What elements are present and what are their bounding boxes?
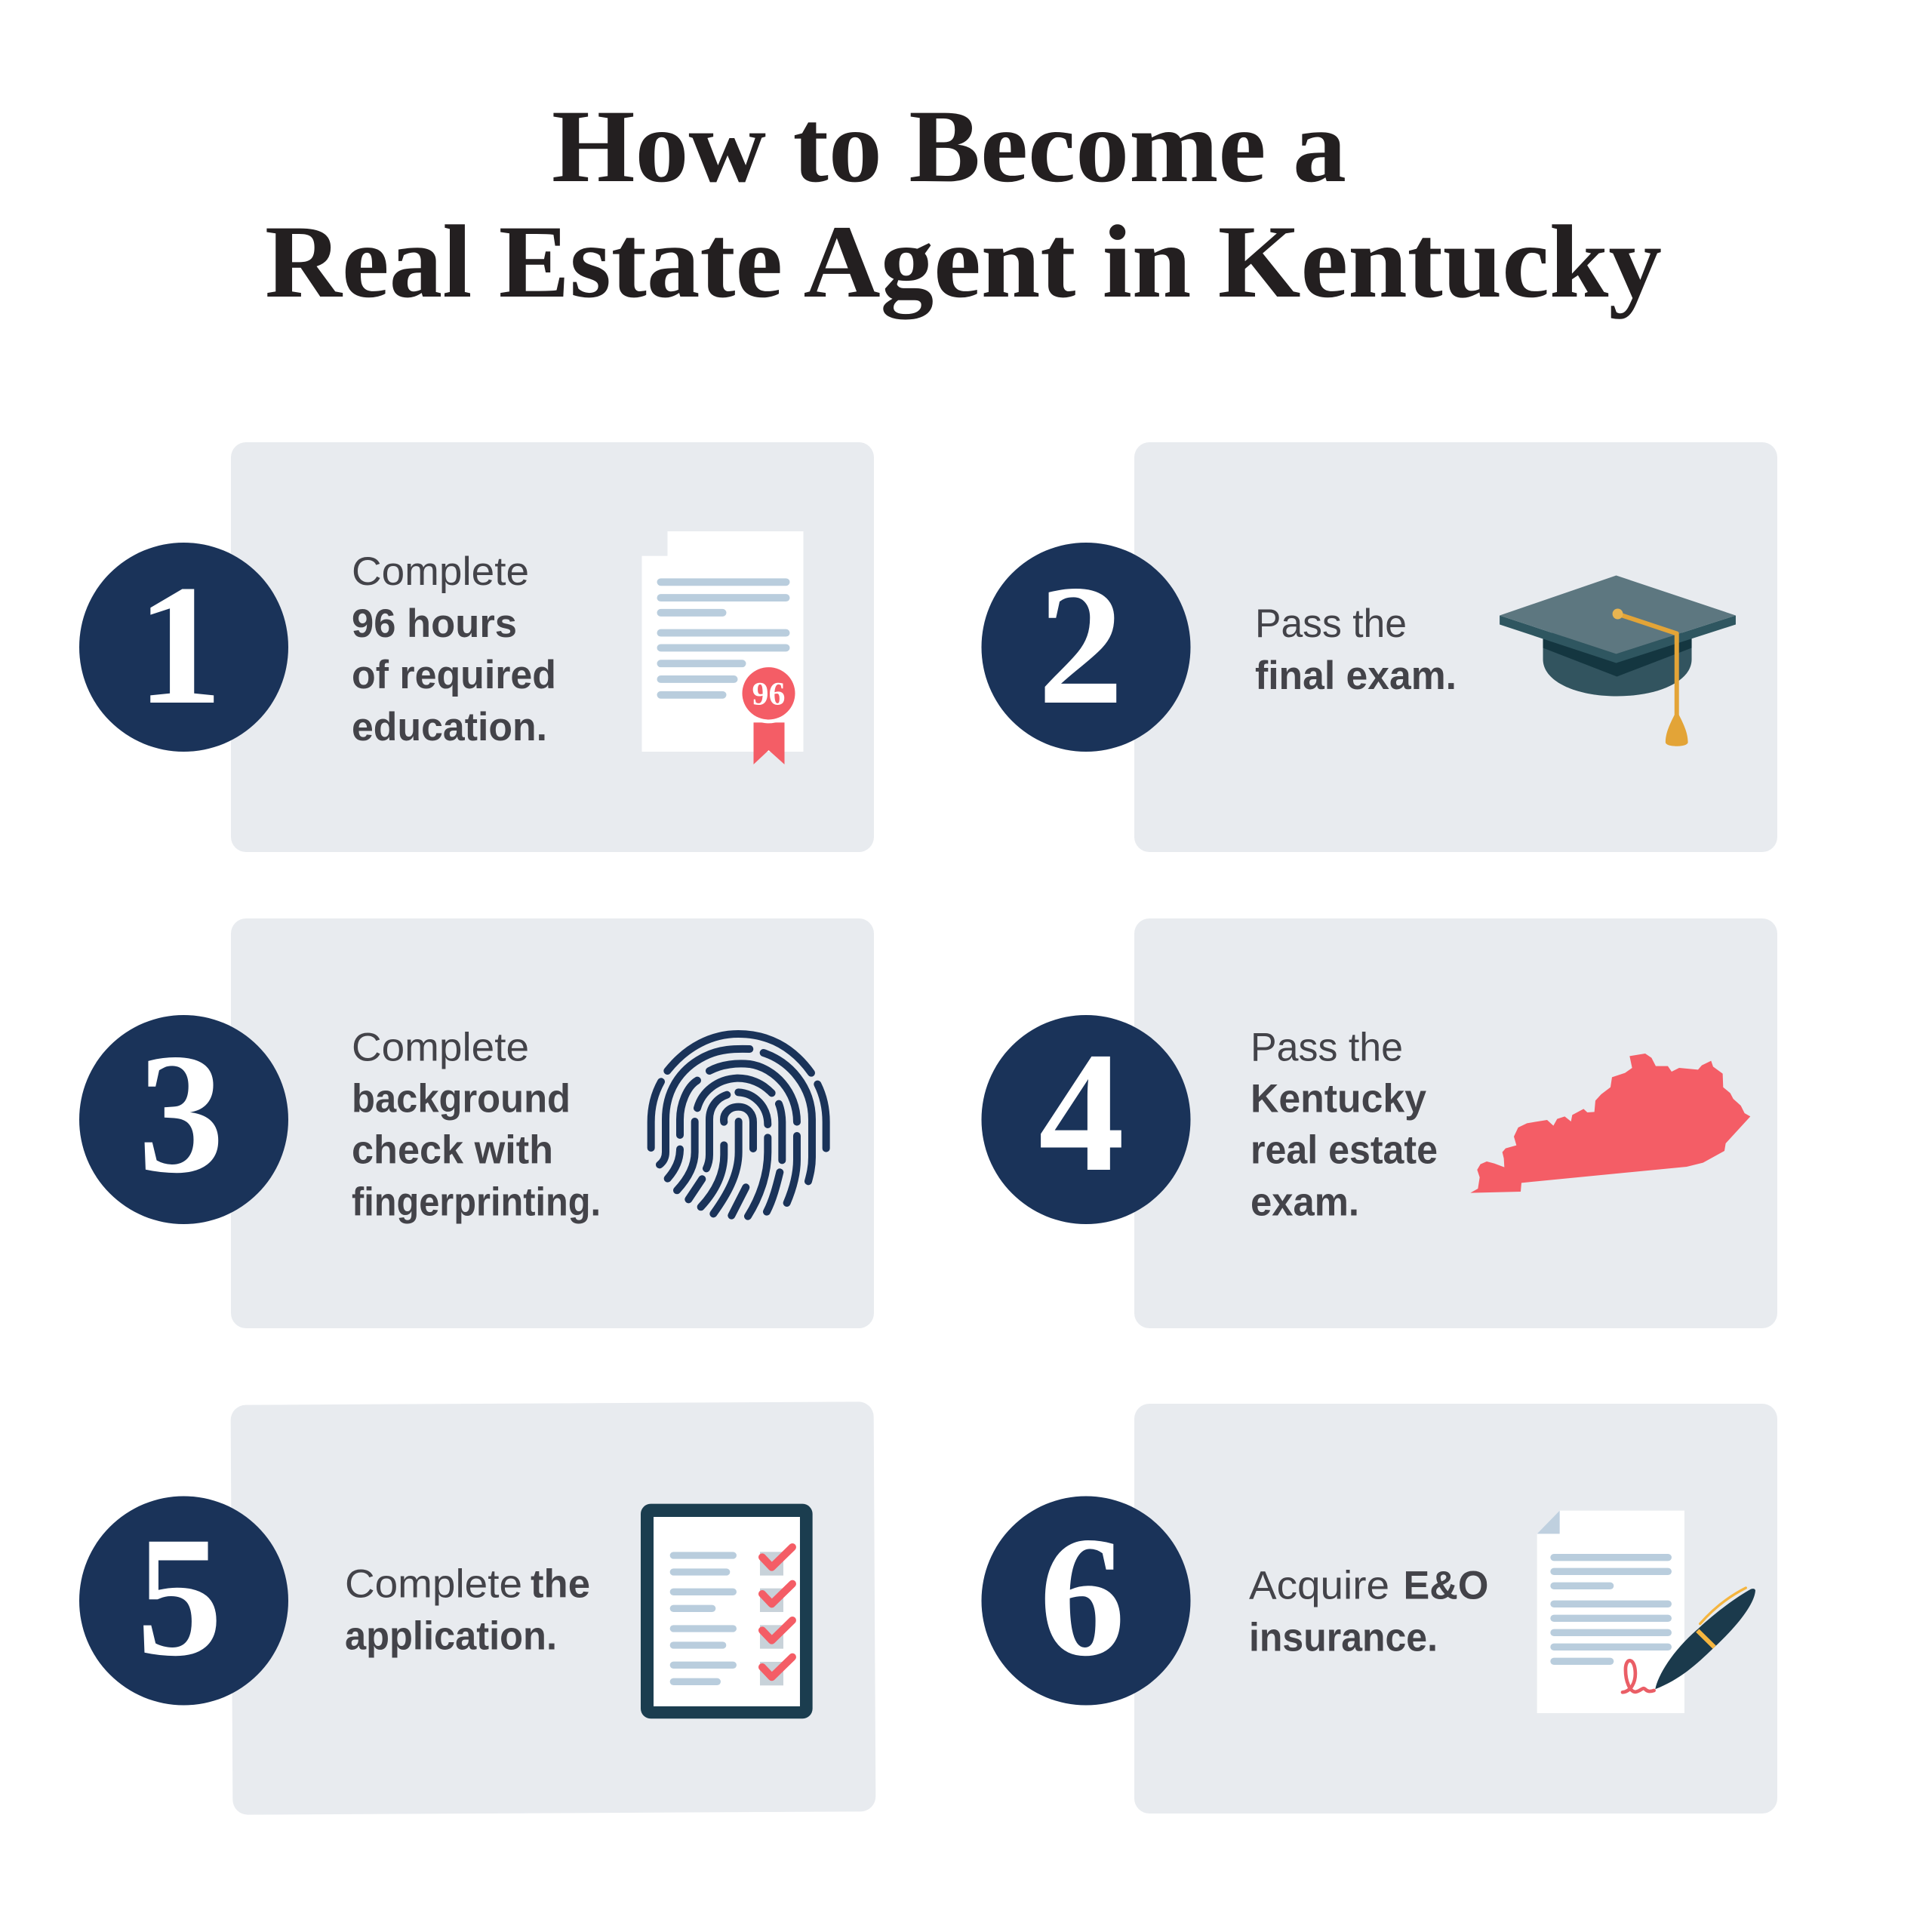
- number badge 1: [79, 543, 288, 752]
- text: step 6: insurance.: [1249, 1615, 1438, 1660]
- icon: certificate with 96 badge: 96: [752, 676, 785, 712]
- number badge 4: 4: [1038, 1017, 1124, 1208]
- title: Real Estate Agent in Kentucky: [265, 204, 1662, 319]
- icon: Kentucky state map: [1470, 1054, 1750, 1193]
- text: step 2: Pass the: [1255, 601, 1407, 646]
- text: step 6: [1249, 1564, 1488, 1660]
- text: step 3: Complete: [352, 1025, 529, 1070]
- text: step 4: Kentucky: [1251, 1076, 1427, 1121]
- text: step 6: Acquire: [1249, 1564, 1389, 1607]
- text: step 5: application.: [345, 1614, 557, 1659]
- text: step 6: E&O: [1404, 1564, 1488, 1607]
- panel: step 2: [1134, 442, 1777, 852]
- title: How to Become a: [552, 88, 1346, 204]
- panel: step 3: [231, 918, 874, 1328]
- icon: certificate with 96 badge: [641, 531, 803, 764]
- text: step 5: the: [531, 1562, 590, 1606]
- panel: step 6: [1134, 1404, 1777, 1814]
- number badge 5: [79, 1496, 288, 1706]
- number badge 6: [981, 1496, 1191, 1706]
- panel: step 5: [231, 1401, 875, 1815]
- text: step 3: background: [352, 1076, 571, 1121]
- text: step 3: check with: [352, 1128, 553, 1173]
- text: step 1: [352, 549, 556, 749]
- step 1: [79, 442, 874, 852]
- icon: graduation cap: [1500, 575, 1736, 746]
- text: step 1: Complete: [352, 549, 529, 594]
- text: step 1: education.: [352, 705, 547, 749]
- number badge 1: 1: [137, 550, 223, 740]
- text: step 2: [1255, 601, 1457, 698]
- text: step 4: [1251, 1025, 1438, 1224]
- number badge 4: [981, 1015, 1191, 1224]
- number badge 3: 3: [138, 1019, 224, 1209]
- text: step 2: final exam.: [1255, 654, 1457, 698]
- text: step 4: exam.: [1251, 1180, 1359, 1224]
- number badge 6: 6: [1039, 1502, 1125, 1692]
- text: step 4: real estate: [1251, 1128, 1438, 1173]
- title: [265, 88, 1662, 319]
- text: step 5: [345, 1562, 590, 1659]
- text: step 4: Pass the: [1251, 1025, 1403, 1070]
- text: step 3: fingerprinting.: [352, 1180, 601, 1224]
- icon: checklist: [641, 1504, 813, 1718]
- step 2: [981, 442, 1777, 852]
- number badge 2: 2: [1038, 550, 1124, 740]
- step 3: [79, 918, 874, 1328]
- text: step 1: of required: [352, 653, 556, 697]
- number badge 3: [79, 1015, 288, 1224]
- icon: fingerprint: [651, 1034, 826, 1217]
- text: step 1: 96 hours: [352, 601, 517, 646]
- text: step 5: Complete: [345, 1562, 522, 1606]
- panel: step 1: [231, 442, 874, 852]
- text: step 3: [352, 1025, 601, 1224]
- number badge 5: 5: [137, 1502, 223, 1692]
- step 4: [981, 918, 1777, 1328]
- step 6: [981, 1404, 1777, 1814]
- number badge 2: [981, 543, 1191, 752]
- panel: step 4: [1134, 918, 1777, 1328]
- icon: signed document with pen: [1537, 1511, 1755, 1713]
- step 5: [79, 1401, 875, 1815]
